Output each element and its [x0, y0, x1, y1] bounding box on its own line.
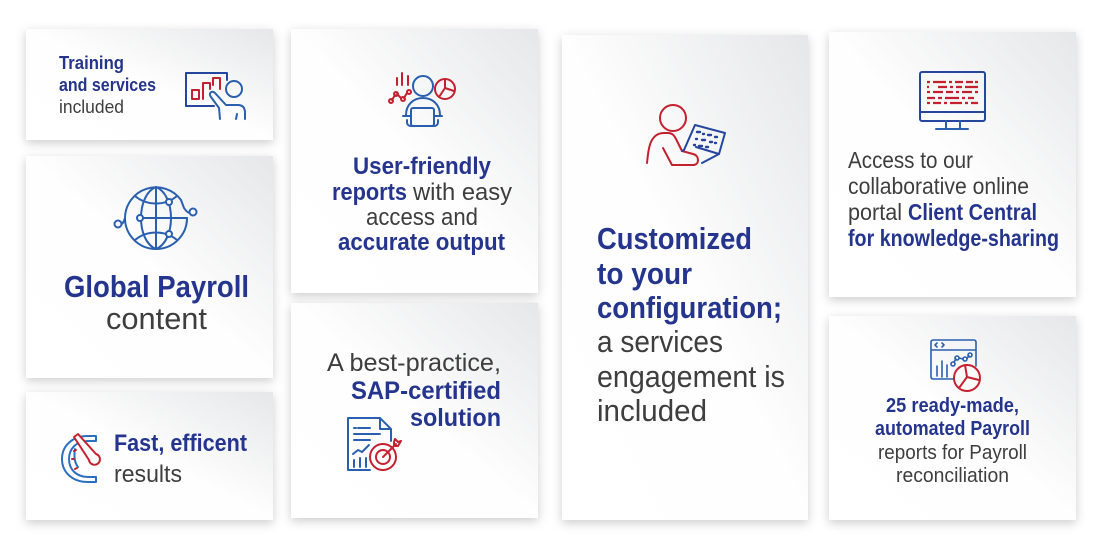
text: access to portal: Access to our: [848, 147, 973, 173]
heading: customized to your configuration: [597, 221, 782, 325]
panel: customized configuration: [562, 35, 808, 520]
text: services engagement: [597, 324, 785, 428]
icon: report window with pie: [931, 340, 980, 391]
text: access to portal: portal: [848, 199, 902, 225]
heading: customized to your configuration: configuration;: [597, 290, 782, 325]
heading: ready-made automated payroll: automated Payroll: [875, 418, 1030, 440]
text: results: results: [114, 461, 182, 488]
text: user-friendly reports: [332, 153, 512, 256]
icon: person at laptop: [647, 105, 725, 165]
text: access to portal: [848, 147, 1059, 251]
text: content: content: [106, 301, 207, 336]
heading: training and services: [59, 53, 156, 95]
text: access to portal: collaborative online: [848, 173, 1029, 199]
text: user-friendly reports: reports: [332, 179, 407, 206]
heading: ready-made automated payroll: 25 ready-made,: [886, 395, 1019, 417]
text: included: included: [59, 97, 124, 117]
heading: sap-certified solution: [351, 377, 501, 432]
icon: monitor: [920, 72, 985, 129]
heading: global payroll: Global Payroll: [64, 269, 249, 304]
panel: sap-certified: [291, 303, 538, 518]
heading: customized to your configuration: to your: [597, 256, 692, 291]
panel: global payroll: [26, 156, 273, 378]
icon: speedometer: [62, 434, 100, 482]
heading: fast efficent: Fast, efficent: [114, 430, 247, 457]
panel: training: [26, 29, 273, 140]
heading: customized to your configuration: Customized: [597, 221, 752, 256]
heading: ready-made automated payroll: [875, 395, 1030, 440]
text: access to portal: Client Central: [908, 199, 1037, 225]
text: user-friendly reports: access and: [366, 204, 478, 231]
panel: payroll reports: [829, 316, 1076, 520]
text: reports for reconciliation: reports for Payroll: [878, 442, 1027, 464]
icon: user with laptop and charts: [389, 73, 455, 126]
heading: training and services: Training: [59, 53, 124, 73]
text: services engagement: included: [597, 393, 707, 428]
text: user-friendly reports: accurate output: [338, 229, 505, 256]
panel: user-friendly reports: [291, 29, 538, 293]
text: user-friendly reports: User-friendly: [353, 153, 492, 180]
text: access to portal: for knowledge-sharing: [848, 225, 1059, 251]
panel: client central: [829, 32, 1076, 297]
heading: training and services: and services: [59, 75, 156, 95]
text: reports for reconciliation: reconciliation: [896, 465, 1009, 487]
text: services engagement: engagement is: [597, 359, 785, 394]
icon: globe: [114, 187, 196, 249]
heading: sap-certified solution: solution: [410, 404, 501, 432]
text: services engagement: a services: [597, 324, 723, 359]
panel: fast results: [26, 392, 273, 520]
text: user-friendly reports: with easy: [412, 179, 512, 206]
heading: sap-certified solution: SAP-certified: [351, 377, 501, 405]
text: best-practice: A best-practice,: [327, 349, 501, 377]
text: reports for reconciliation: [878, 442, 1027, 487]
icon: document with target: [348, 418, 401, 470]
icon: presenter at chart: [186, 73, 245, 119]
